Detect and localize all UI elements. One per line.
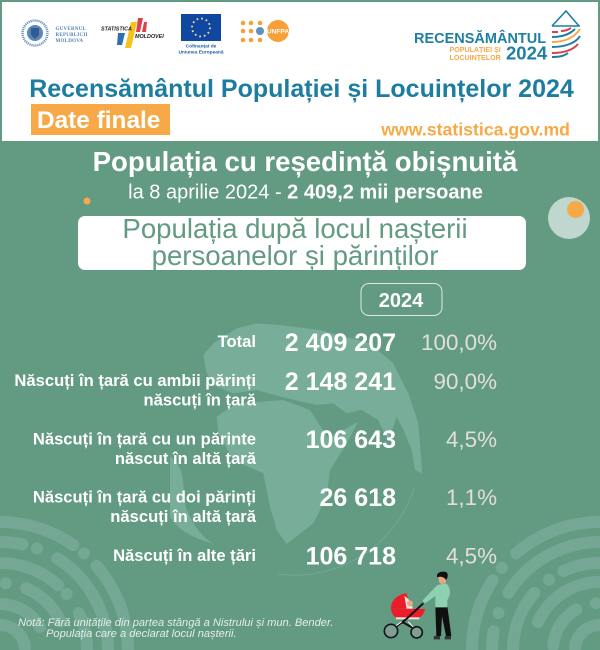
table row: born abroad: 4,5% [446, 544, 497, 568]
logo: Guvernul Republicii Moldova [22, 20, 88, 46]
table row: both parents born in country [14, 368, 497, 410]
logo: European Union [178, 14, 224, 56]
footnote [18, 617, 333, 640]
logo: Guvernul Republicii Moldova: REPUBLICII [56, 33, 88, 38]
badge: Date finale: Date finale [37, 107, 160, 134]
decorative circle with orange dot [548, 197, 590, 239]
table row: both parents born in country: născuți în țară [143, 390, 257, 410]
table row: both parents born in country: 90,0% [434, 369, 497, 394]
panel: subtitle by place of birth: Populația după locul nașterii [122, 213, 468, 244]
table row: one parent born abroad: 4,5% [446, 427, 497, 452]
website link: www.statistica.gov.md [380, 120, 570, 140]
logo: Guvernul Republicii Moldova: MOLDOVA [56, 39, 83, 44]
logo: Recensământul 2024: LOCUINȚELOR [450, 54, 501, 62]
year header 2024: 2024 [379, 290, 424, 312]
table row: born abroad: 106 718 [306, 542, 396, 570]
table row: one parent born abroad: Născuți în țară cu un părinte [33, 430, 256, 448]
table row: total [218, 329, 497, 357]
table row: two parents born abroad: Născuți în țară cu doi părinți [33, 488, 256, 506]
table row: two parents born abroad: 26 618 [320, 484, 396, 512]
table row: one parent born abroad: născut în altă țară [115, 449, 257, 468]
illustration: man with stroller [384, 572, 451, 639]
title: Recensământul Populației și Locuințelor 2024 [29, 75, 574, 103]
logo: Statistica Moldovei: MOLDOVEI [135, 34, 164, 40]
panel: subtitle by place of birth [78, 213, 526, 271]
table row: both parents born in country: Născuți în țară cu ambii părinți [14, 371, 256, 390]
footnote: Populația care a declarat locul nașterii. [46, 628, 237, 640]
year header 2024 [361, 284, 442, 316]
logo: UNFPA: UNFPA [267, 28, 289, 36]
table row: one parent born abroad [33, 426, 497, 468]
decorative rings: bottom right [472, 522, 600, 650]
logo: Statistica Moldovei: STATISTICA [101, 26, 132, 32]
logo: Recensământul 2024: 2024 [506, 42, 548, 64]
table row: total: Total [218, 332, 256, 351]
decorative rings: bottom left [0, 522, 128, 650]
logo: Recensământul 2024: RECENSĂMÂNTUL [414, 29, 546, 47]
table row: total: 2 409 207 [285, 329, 396, 357]
table row: born abroad [113, 542, 497, 570]
globe background [170, 323, 422, 575]
logo: Statistica Moldovei [101, 18, 164, 48]
logo: European Union: Uniunea Europeană [178, 50, 224, 56]
table row: both parents born in country: 2 148 241 [285, 368, 396, 396]
table row: two parents born abroad: 1,1% [446, 485, 497, 510]
icon: census house [552, 11, 580, 57]
logo: UNFPA [241, 20, 289, 42]
table row: two parents born abroad [33, 484, 497, 526]
heading: resident population: Populația cu reședință obișnuită [93, 146, 518, 177]
logo: European Union: Cofinanțat de [186, 44, 217, 50]
table row: one parent born abroad: 106 643 [306, 426, 396, 454]
subheading: la 8 aprilie 2024 - 2 409,2 mii persoane [128, 182, 483, 204]
footnote: Notă: Fără unitățile din partea stângă a Nistrului și mun. Bender. [18, 617, 333, 629]
table row: total: 100,0% [421, 330, 497, 355]
table row: two parents born abroad: născuți în altă țară [110, 507, 257, 526]
header white panel [2, 2, 598, 141]
logo: Recensământul 2024: POPULAȚIEI ȘI [450, 46, 501, 54]
logo: Recensământul 2024 [414, 11, 580, 64]
panel: subtitle by place of birth: persoanelor și părinților [152, 240, 438, 271]
decorative small orange dot [84, 198, 90, 204]
table row: born abroad: Născuți în alte țări [113, 546, 256, 565]
logo: Guvernul Republicii Moldova: GUVERNUL [56, 27, 87, 32]
